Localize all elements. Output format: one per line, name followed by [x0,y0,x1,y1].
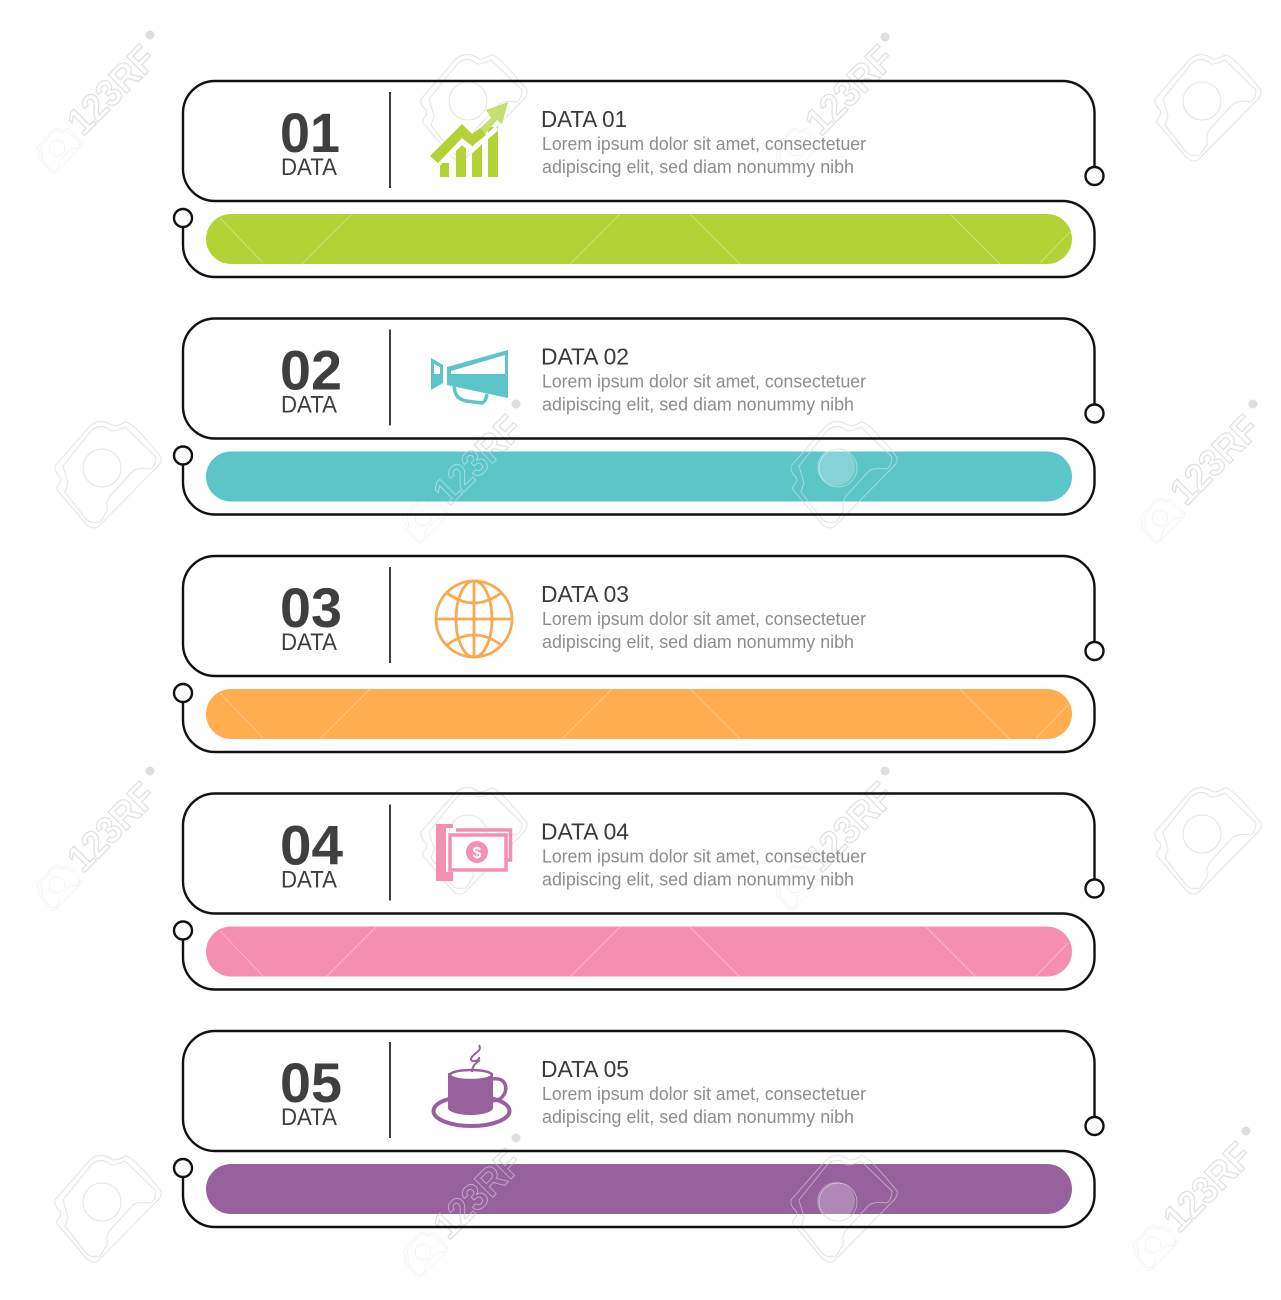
text block 01 [541,106,866,177]
divider 02 [389,330,391,426]
text block 01: adipiscing elit, sed diam nonummy nibh [542,156,854,177]
number 02: DATA [281,392,337,418]
number 05: DATA [281,1104,337,1131]
divider 01 [389,92,391,188]
text block 02: DATA 02 [541,344,629,370]
watermarks: 123RF [426,408,531,513]
watermark overlay on bars: 123RF [426,408,531,513]
watermarks: 123RF [60,38,165,143]
colour bar 02 [206,452,1072,502]
panel: row 04 [174,794,1104,990]
icon: banknotes: $ [473,845,482,862]
text block 02 [541,344,866,414]
number 02: 02 [280,338,342,402]
text block 05: Lorem ipsum dolor sit amet, consectetuer [542,1083,866,1104]
watermarks: 123RF [426,1142,531,1247]
text block 04: DATA 04 [541,818,629,844]
watermark lines on green bar [220,214,1070,264]
text block 03: Lorem ipsum dolor sit amet, consectetuer [542,608,866,629]
number 04: DATA [281,866,337,894]
icon: coffee cup [434,1045,510,1126]
number 04: 04 [280,814,343,876]
text block 05: DATA 05 [541,1056,629,1082]
text block 03: adipiscing elit, sed diam nonummy nibh [542,631,854,652]
outline frame 01 [174,81,1104,277]
panel: row 05 [174,1031,1104,1227]
divider 04 [389,804,391,900]
text block 01: Lorem ipsum dolor sit amet, consectetuer [542,133,866,154]
number 03: DATA [281,629,337,656]
watermarks: 123RF [798,775,903,880]
icon: megaphone [431,350,508,403]
panel: row 01 [174,81,1104,277]
text block 03: DATA 03 [541,581,629,607]
watermarks: 123RF [60,775,165,880]
panel: row 03 [174,556,1104,752]
text block 03 [541,581,866,652]
divider 03 [389,567,391,663]
text block 04: adipiscing elit, sed diam nonummy nibh [542,868,854,890]
text block 04: Lorem ipsum dolor sit amet, consectetuer [542,846,866,866]
number 05: 05 [280,1051,342,1114]
outline frame 02 [174,318,1104,514]
outline frame 04 [174,794,1104,990]
number 01: DATA [281,154,337,181]
colour bar 01 [206,214,1072,264]
divider 05 [389,1042,391,1138]
text block 05: adipiscing elit, sed diam nonummy nibh [542,1106,854,1127]
watermark lines on pink bar [220,927,1068,977]
colour bar 03 [206,689,1072,739]
watermarks: 123RF [1156,1135,1261,1240]
number 01: 01 [280,101,340,164]
watermark overlay on bars: 123RF [426,1142,531,1247]
outline frame 03 [174,556,1104,752]
outline frame 05 [174,1031,1104,1227]
colour bar 04 [206,926,1072,976]
colour bar 05 [206,1164,1072,1214]
icon: globe [436,581,512,657]
text block 04 [541,818,866,890]
watermark lines on orange bar [220,689,1068,739]
text block 02: Lorem ipsum dolor sit amet, consectetuer [542,370,866,392]
panel: row 02 [174,318,1104,514]
text block 01: DATA 01 [541,106,627,132]
watermarks: 123RF [798,38,903,143]
text block 02: adipiscing elit, sed diam nonummy nibh [542,394,854,414]
watermark overlay on bars [434,452,898,1214]
watermarks: 123RF [1163,408,1268,513]
icon: growth chart [430,102,508,177]
number 03: 03 [280,576,342,639]
icon: banknotes [436,824,510,881]
text block 05 [541,1056,866,1127]
